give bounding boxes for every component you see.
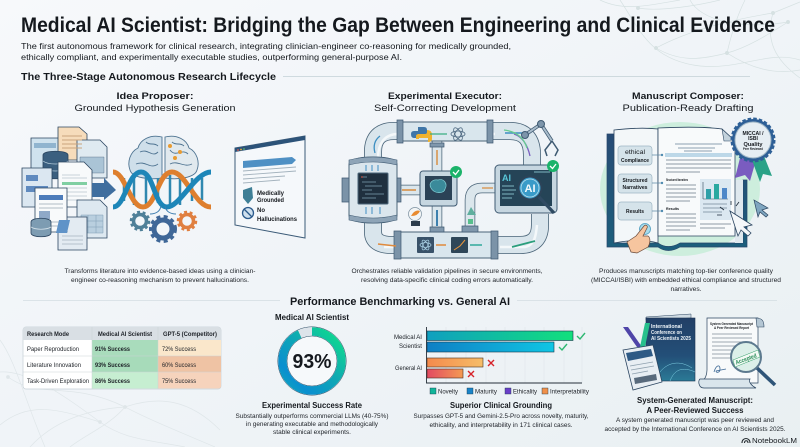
label: structured narratives	[618, 174, 652, 193]
logo: NotebookLM: NotebookLM	[752, 436, 797, 445]
text: idea proposer description: Transforms literature into evidence-based ideas using a clinician-	[64, 268, 255, 275]
network pattern: bottom left	[0, 340, 220, 447]
text: executor description: resolving data-specific clinical coding errors automatically.	[361, 277, 533, 284]
chart: clinical grounding bars: Medical AI	[394, 334, 422, 341]
heading: idea proposer: Grounded Hypothesis Generation	[74, 102, 236, 113]
chart: clinical grounding bars: Scientist	[399, 343, 422, 350]
table: research mode comparison: Medical AI Scientist	[98, 331, 153, 338]
bar: novelty	[427, 331, 573, 340]
heading: idea proposer	[74, 90, 236, 113]
heading: idea proposer: Idea Proposer:	[116, 90, 194, 101]
icon: quality ribbon badge: ISBI	[748, 136, 758, 142]
icon: browser window: Grounded	[257, 198, 284, 204]
text: composer description: narratives.	[670, 286, 702, 293]
text: composer description	[591, 268, 781, 293]
heading: manuscript composer: Publication-Ready Drafting	[622, 102, 754, 113]
text: composer description: Produces manuscripts matching top-tier conference quality	[599, 268, 774, 275]
icon: brain	[129, 136, 198, 179]
text: idea proposer description: engineer co-reasoning mechanism to prevent hallucinations.	[71, 277, 249, 284]
legend: clinical grounding: Maturity	[475, 388, 498, 396]
icon: quality ribbon badge: Quality	[744, 142, 763, 148]
panel: idea proposer	[22, 90, 305, 284]
icon: atom and chart modules	[417, 237, 482, 253]
illustration: conference book and lanyard badge: AI Scientists 2025	[651, 336, 691, 342]
icon: AI monitor with magnifier	[495, 160, 559, 213]
table: research mode comparison: GPT-5 (Competitor)	[163, 331, 217, 338]
icon: cursors	[717, 200, 768, 236]
icon: browser window	[235, 136, 305, 238]
network pattern: top right	[600, 0, 800, 78]
text: composer description: (MICCAI/ISBI) with embedded ethical compliance and structured	[591, 277, 781, 284]
table: research mode comparison: 91% Success	[95, 346, 130, 353]
icon: robot arm	[522, 120, 558, 156]
icon: DNA helix	[113, 172, 211, 207]
section heading: lifecycle: The Three-Stage Autonomous Research Lifecycle	[21, 71, 276, 83]
subtitle: ethically compliant, and experimentally executable studies, outperforming general-purpose AI.	[21, 52, 402, 62]
text: superior clinical grounding	[414, 400, 589, 429]
icon: gears	[131, 206, 196, 242]
manuscript page content: Results	[666, 207, 679, 211]
chart: 93% donut	[275, 312, 349, 395]
illustration: accepted manuscript with magnifier: Accepted	[735, 353, 758, 367]
text: superior clinical grounding: Superior Clinical Grounding	[450, 400, 552, 410]
chart: 93% donut: 93%	[292, 351, 332, 373]
icon: brain monitor	[420, 166, 462, 206]
icon: pipe flask	[467, 188, 493, 224]
label: ethical compliance: ethical	[625, 149, 646, 156]
subtitle: The first autonomous framework for clinical research, integrating clinician-engineer co-reasoning for medically grounded,	[21, 41, 511, 51]
icon: browser window: No	[257, 208, 265, 214]
icon: code tank	[342, 157, 401, 223]
chart: 93% donut: Medical AI Scientist	[275, 312, 349, 322]
label: results: Results	[626, 209, 644, 215]
text: idea proposer description	[64, 268, 255, 284]
text: executor description	[352, 268, 543, 284]
text: peer-reviewed success: A Peer-Reviewed Success	[646, 405, 744, 415]
icon: quality ribbon badge: Peer Reviewed	[743, 147, 763, 151]
legend: clinical grounding: Ethicality	[513, 388, 538, 396]
label: ethical compliance	[618, 146, 652, 165]
text: experimental success rate	[236, 400, 388, 436]
label: results	[618, 202, 652, 220]
text: executor description: Orchestrates reliable validation pipelines in secure environments,	[352, 268, 543, 275]
icon: python and atom	[411, 126, 465, 142]
icon: quality ribbon badge: MICCAI /	[742, 131, 764, 137]
table: research mode comparison	[23, 327, 221, 389]
illustration: conference book and lanyard badge	[623, 314, 695, 390]
icon: AI monitor with magnifier: AI	[502, 173, 511, 183]
table: research mode comparison: 93% Success	[95, 362, 130, 369]
text: peer-reviewed success: A system generated manuscript was peer reviewed and	[616, 417, 774, 424]
legend: clinical grounding: Interpretability	[550, 388, 590, 396]
legend: clinical grounding: Novelty	[438, 388, 459, 396]
text: peer-reviewed success: System-Generated Manuscript:	[637, 395, 753, 405]
text: superior clinical grounding: Surpasses GPT-5 and Gemini-2.5-Pro across novelty, maturity,	[414, 413, 589, 420]
icon: AI monitor with magnifier: AI	[524, 183, 536, 195]
heading: experimental executor	[374, 90, 516, 113]
table: research mode comparison: 75% Success	[162, 378, 196, 385]
diagram: pipe network	[373, 120, 540, 259]
icon: browser window: Hallucinations	[257, 217, 298, 223]
icon: browser window: Medically	[257, 191, 285, 197]
illustration: accepted manuscript with magnifier	[699, 318, 775, 388]
heading: manuscript composer: Manuscript Composer:	[632, 90, 744, 101]
table: research mode comparison: Paper Reproduction	[27, 346, 79, 353]
text: experimental success rate: in generating executable and methodologically	[246, 421, 379, 428]
heading: manuscript composer	[622, 90, 754, 113]
text: peer-reviewed success	[604, 395, 786, 433]
icon: quality ribbon badge	[732, 119, 774, 182]
icon: document stack	[22, 127, 116, 250]
icon: light bulb	[408, 208, 422, 226]
label: ethical compliance: Compliance	[621, 158, 649, 164]
text: superior clinical grounding: ethicality, and interpretability in 171 clinical cases.	[430, 422, 573, 429]
text: experimental success rate: Substantially outperforms commercial LLMs (40-75%)	[236, 413, 388, 420]
chart: clinical grounding bars: General AI	[395, 365, 422, 372]
text: peer-reviewed success: accepted by the International Conference on AI Scientists 2025.	[604, 426, 786, 433]
manuscript page content: Structured Narratives	[666, 178, 688, 182]
illustration: accepted manuscript with magnifier: A Peer Reviewed Report	[714, 326, 750, 330]
panel: experimental executor	[342, 90, 559, 284]
table: research mode comparison: Research Mode	[27, 331, 69, 338]
illustration: conference book and lanyard badge: International	[651, 324, 683, 330]
table: research mode comparison: 60% Success	[162, 362, 196, 369]
chart: clinical grounding bars	[394, 327, 585, 383]
text: experimental success rate: Experimental Success Rate	[262, 400, 362, 410]
table: research mode comparison: 72% Success	[162, 346, 196, 353]
illustration: accepted manuscript with magnifier: System Generated Manuscript	[710, 322, 754, 326]
illustration: conference book and lanyard badge: Conference on	[651, 330, 682, 336]
legend: clinical grounding	[430, 388, 590, 396]
section heading: benchmarking: Performance Benchmarking vs. General AI	[290, 296, 510, 308]
subtitle	[21, 41, 511, 62]
heading: experimental executor: Self-Correcting Development	[374, 102, 516, 113]
heading: experimental executor: Experimental Executor:	[388, 90, 502, 101]
illustration: open book	[600, 122, 760, 256]
table: research mode comparison: Literature Innovation	[27, 362, 81, 369]
manuscript page content	[652, 144, 732, 230]
text: experimental success rate: stable clinical experiments.	[273, 429, 351, 436]
label: structured narratives: Narratives	[622, 185, 648, 191]
table: research mode comparison: 86% Success	[95, 378, 130, 385]
icon: pointing hand	[627, 224, 650, 253]
table: research mode comparison: Task-Driven Exploration	[27, 378, 89, 385]
panel: manuscript composer	[591, 90, 781, 293]
label: structured narratives: Structured	[622, 178, 648, 184]
